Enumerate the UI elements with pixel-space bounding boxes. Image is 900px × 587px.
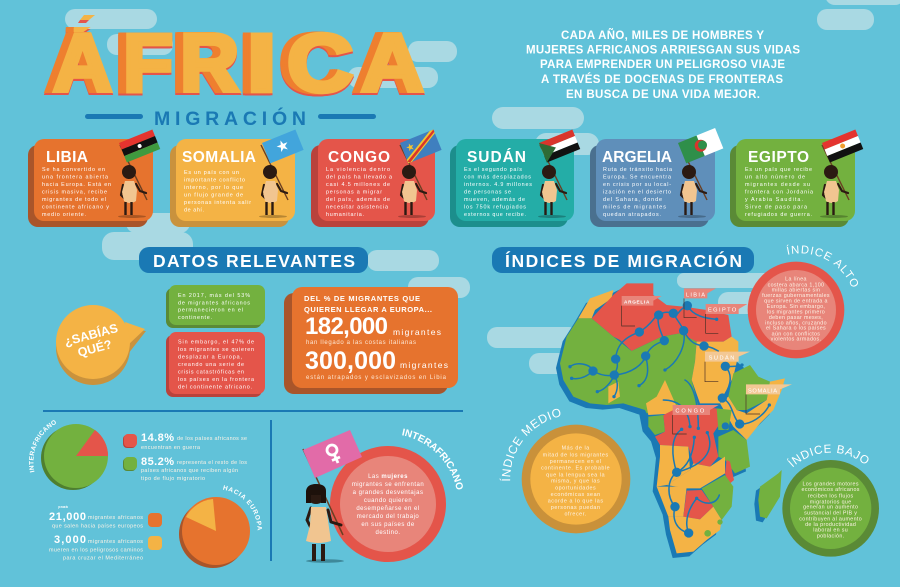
circle: índice bajo: sustancial del PIB y: [804, 510, 857, 516]
title: ÁFRICA: I: [246, 18, 277, 109]
legend: hacia Europa: mueren en los peligrosos caminos: [49, 548, 143, 554]
callout: ¿Sabías qué?: QUÉ?: [76, 336, 113, 360]
panel: Congo: casi 4.5 millones de: [326, 182, 390, 188]
panel: Libia: medio oriente.: [42, 212, 86, 218]
panel: migrantes que quieren llegar a Europa: QUIEREN LLEGAR A EUROPA...: [304, 305, 432, 314]
circle: índice alto: La línea: [785, 277, 807, 283]
panel: Somalia: Es un país con un: [184, 170, 239, 176]
title: ÁFRICA: [44, 15, 425, 96]
legend: hacia Europa: para cruzar el Mediterráneo: [63, 556, 143, 562]
panel: Argelia: quedan atrapados.: [603, 212, 661, 218]
panel: Sudán: con más desplazados: [464, 174, 531, 180]
map flag: Sudán: SUDÁN: [709, 355, 735, 362]
panel: migrantes que quieren llegar a Europa: 182,000: [305, 313, 388, 340]
subtitle: MIGRACIÓN: MIGRACIÓN: [154, 106, 306, 130]
title: ÁFRICA: C: [287, 18, 353, 109]
panel: 53%: continente.: [178, 315, 212, 321]
panel: migrantes que quieren llegar a Europa: migrantes: [400, 360, 448, 370]
circle: índice medio: [500, 408, 630, 534]
map: Africa migration: [500, 244, 879, 558]
legend: hacia Europa: 3,000: [54, 534, 86, 546]
panel: mujeres migrantes: Las mujeres: [368, 474, 408, 480]
map flag: Congo: CONGO: [675, 409, 705, 415]
circle: índice medio: Más de la: [562, 446, 590, 452]
map flag: Libia: LIBIA: [686, 293, 705, 299]
panel: Congo: La violencia dentro: [326, 167, 390, 173]
panel: Argelia: del Sahara, donde: [603, 197, 662, 203]
panel: Sudán: de personas se: [464, 190, 511, 196]
map flag: Argelia: [622, 296, 662, 326]
circle: índice alto: costera abarca 1,100: [768, 282, 824, 288]
legend: interafricano: encuentran en guerra: [141, 445, 200, 451]
pie chart: interafricano: [28, 420, 108, 490]
panel: Argelia: Ruta de tránsito hacia: [603, 167, 672, 173]
panel: Somalia: interno, por lo que: [184, 185, 243, 191]
legend: interafricano: países africanos que reciben algún: [141, 468, 238, 474]
heading: Datos relevantes: DATOS RELEVANTES: [153, 251, 355, 271]
panel: Somalia: un flujo grande de: [184, 192, 243, 198]
intro text: [526, 29, 800, 101]
panel: Libia: una frontera abierta: [42, 174, 108, 180]
map flag: Sudán: [705, 352, 750, 382]
intro text: CADA AÑO, MILES DE HOMBRES Y: [561, 29, 764, 42]
panel: mujeres migrantes: cuando quieren: [364, 498, 412, 504]
panel: mujeres migrantes: mercado del trabajo: [357, 514, 419, 520]
panel: Argelia: en crisis por su local-: [603, 182, 671, 188]
panel: mujeres migrantes: INTERAFRICANO: [402, 428, 463, 490]
panel: Egipto: EGIPTO: [748, 149, 809, 166]
panel: Sudán: los 750k refugiados: [464, 204, 526, 210]
circle: índice medio: ofrecer.: [565, 511, 587, 517]
legend: hacia Europa: 21,000: [49, 511, 86, 523]
title: ÁFRICA: F: [123, 18, 173, 109]
legend: hacia Europa: migrantes africanos: [88, 515, 143, 521]
circle: índice alto: los migrantes primero: [767, 309, 825, 315]
panel: Sudán: [450, 130, 580, 227]
map flag: Egipto: EGIPTO: [708, 308, 737, 314]
panel: migrantes que quieren llegar a Europa: migrantes: [393, 327, 441, 337]
panel: migrantes que quieren llegar a Europa: [284, 287, 458, 394]
circle: índice bajo: económicos africanos: [802, 487, 860, 493]
panel: Somalia: personas intenta salir: [184, 200, 251, 206]
panel: migrantes que quieren llegar a Europa: DEL % DE MIGRANTES QUE: [304, 294, 420, 303]
panel: Egipto: y Arabia Saudita.: [745, 197, 803, 203]
circle: índice medio: permanecen en el: [550, 459, 602, 465]
panel: Congo: del país, además de: [326, 197, 390, 203]
circle: índice medio: acorde a lo que las: [548, 498, 604, 504]
panel: Libia: continente africano y: [42, 204, 109, 210]
circle: índice bajo: migratorios que: [810, 499, 852, 505]
legend: interafricano: [123, 432, 247, 482]
panel: mujeres migrantes: [302, 428, 463, 563]
panel: Congo: ★: [404, 141, 417, 155]
panel: Somalia: de ahí.: [184, 208, 204, 214]
panel: Egipto: Es un país que recibe: [745, 167, 812, 173]
panel: Egipto: refugiados de guerra.: [745, 212, 812, 218]
circle: índice bajo: generan un aumento: [803, 505, 858, 511]
panel: Congo: [311, 130, 442, 227]
circle: índice medio: personas puedan: [551, 505, 601, 511]
panel: Libia: LIBIA: [46, 149, 88, 166]
panel: Sudán: mueven, además de: [464, 197, 525, 203]
panel: mujeres migrantes: migrantes se enfrentan: [352, 482, 424, 488]
map flag: Libia: [684, 288, 716, 318]
legend: interafricano: tipo de flujo migratorio: [141, 476, 205, 482]
panel: 53%: [166, 285, 265, 328]
route nodes: [568, 301, 771, 538]
intro text: MUJERES AFRICANOS ARRIESGAN SUS VIDAS: [526, 44, 800, 56]
legend: hacia Europa: [49, 504, 162, 562]
panel: Somalia: ★: [273, 136, 292, 157]
panel: Egipto: un alto número de: [745, 174, 805, 180]
panel: Libia: [28, 130, 160, 227]
circle: índice alto: violentos armados.: [771, 337, 821, 343]
circle: índice bajo: laboral en su: [813, 528, 848, 534]
panel: Somalia: SOMALIA: [182, 149, 256, 166]
circle: índice bajo: Los grandes motores: [802, 481, 859, 487]
callout: ¿Sabías qué?: [56, 305, 146, 385]
legend: interafricano: 85.2%: [141, 456, 174, 468]
heading: Índices de migración: ÍNDICES DE MIGRACIÓN: [505, 250, 742, 271]
legend: hacia Europa: por cada: [58, 504, 69, 509]
title: ÁFRICA: A: [361, 17, 424, 108]
panel: Congo: necesitar asistencia: [326, 204, 388, 210]
circle: índice medio: continente. Es probable: [541, 466, 610, 472]
migration routes: [570, 306, 769, 533]
pie chart: interafricano: INTERAFRICANO: [28, 420, 56, 472]
panel: migrantes que quieren llegar a Europa: han llegado a las costas italianas: [306, 340, 416, 346]
map flag: Somalia: [746, 384, 792, 414]
panel: Libia: crisis masiva, recibe: [42, 190, 107, 196]
pie chart: hacia Europa: [179, 485, 262, 568]
legend: interafricano: de los países africanos se: [177, 436, 247, 442]
panel: Sudán: internos. 4.9 millones: [464, 182, 532, 188]
circle: índice alto: fuerzas gubernamentales: [762, 293, 830, 299]
circle: índice bajo: población.: [817, 534, 844, 540]
circle: índice alto: deben pasar meses,: [769, 315, 823, 321]
circle: índice alto: el Sahara o los países: [766, 326, 826, 332]
circle: índice bajo: ÍNDICE BAJO: [787, 444, 869, 467]
panel: migrantes que quieren llegar a Europa: 300,000: [305, 347, 396, 375]
map regions: [560, 283, 785, 553]
panel: migrantes que quieren llegar a Europa: están atrapados y esclavizados en Libia: [306, 375, 447, 381]
panel: Libia: hacia Europa. Está en: [42, 182, 111, 188]
panel: 47%: creando una serie de: [178, 362, 244, 368]
panel: 53%: de migrantes africanos: [178, 300, 250, 306]
panel: Egipto: migrantes desde su: [745, 182, 810, 188]
panel: Congo: CONGO: [328, 149, 390, 166]
subtitle: MIGRACIÓN: [85, 106, 376, 130]
panel: Egipto: frontera con Jordania: [745, 190, 813, 196]
panel: 53%: permanecieron en el: [178, 308, 243, 314]
panel: Argelia: Europa. Se encuentra: [603, 174, 671, 180]
circle: índice alto: ÍNDICE ALTO: [786, 244, 858, 287]
panel: mujeres migrantes: desempeñarse en el: [356, 506, 420, 512]
panel: mujeres migrantes: destino.: [375, 530, 401, 536]
callout: ¿Sabías qué?: ¿SABÍAS: [63, 320, 119, 349]
panel: 47%: los migrantes se quieren: [178, 347, 254, 353]
background clouds: [65, 0, 900, 374]
heading: Índices de migración: [492, 247, 754, 273]
circle: índice alto: aún con conflictos: [772, 331, 820, 337]
circle: índice medio: oportunidades: [555, 485, 596, 491]
map flag: Argelia: ARGELIA: [624, 299, 650, 304]
pie chart: hacia Europa: HACIA EUROPA: [223, 485, 262, 530]
circle: índice medio: económicas sean: [551, 492, 601, 498]
circle: índice alto: millas abiertas sin: [772, 288, 820, 294]
divider: [43, 410, 463, 412]
intro text: PARA EMPRENDER UN PELIGROSO VIAJE: [540, 59, 785, 71]
intro text: EN BUSCA DE UNA VIDA MEJOR.: [566, 89, 760, 101]
panel: Somalia: [170, 130, 304, 227]
panel: Egipto: Sirve de paso para: [745, 204, 807, 210]
title: ÁFRICA: R: [180, 18, 239, 109]
map flag: Congo: [673, 405, 719, 434]
panel: Egipto: [730, 130, 863, 227]
woman with flag: [303, 430, 362, 563]
legend: hacia Europa: que salen hacia países europeos: [52, 524, 143, 530]
panel: Sudán: SUDÁN: [467, 149, 526, 166]
panel: Libia: Se ha convertido en: [42, 167, 105, 173]
legend: hacia Europa: migrantes africanos: [88, 539, 143, 545]
panel: Congo: personas a migrar: [326, 190, 382, 196]
title: ÁFRICA: Á: [53, 18, 112, 109]
panel: 47%: crisis catastróficas en: [178, 370, 244, 376]
panel: 47%: [166, 332, 265, 397]
panel: Sudán: externos que recibe.: [464, 212, 526, 218]
panel: 47%: Sin embargo, el 47% de: [178, 340, 254, 346]
map flag: Somalia: SOMALIA: [748, 388, 777, 394]
map flag: Egipto: [706, 304, 747, 333]
panel: Argelia: miles de migrantes: [603, 204, 666, 210]
circle: índice medio: ÍNDICE MEDIO: [500, 408, 560, 481]
circle: índice alto: [748, 244, 858, 358]
panel: mujeres migrantes: en sus países de: [361, 522, 415, 528]
intro text: A TRAVÉS DE DOCENAS DE FRONTERAS: [541, 73, 783, 86]
panel: Congo: humanitaria.: [326, 212, 364, 218]
circle: índice medio: misma, y que las: [551, 479, 600, 485]
circle: índice bajo: de la productividad: [805, 522, 856, 528]
circle: índice alto: Europa. Sin embargo,: [767, 304, 825, 310]
circle: índice alto: incluso años, cruzando: [765, 320, 827, 326]
panel: mujeres migrantes: a grandes desventajas: [353, 490, 423, 496]
circle: índice medio: mitad de los migrantes: [543, 453, 609, 459]
panel: Sudán: Es el segundo país: [464, 167, 522, 173]
panel: Argelia: ización en el desierto: [603, 190, 671, 196]
panel: Congo: del país ha llevado a: [326, 174, 392, 180]
panel: Somalia: importante conflicto: [184, 178, 245, 184]
circle: índice bajo: [782, 444, 879, 557]
legend: interafricano: representa el resto de los: [177, 460, 247, 466]
panel: Libia: migrantes de todo el: [42, 197, 106, 203]
heading: Datos relevantes: [139, 247, 368, 273]
circle: índice medio: que la lengua sea la: [546, 472, 605, 478]
legend: interafricano: 14.8%: [141, 432, 174, 444]
circle: índice bajo: reciben los flujos: [808, 493, 854, 499]
panel: 47%: del continente africano.: [178, 384, 252, 390]
circle: índice bajo: contribuyen al aumento: [799, 516, 862, 522]
panel: 47%: desplazar a Europa,: [178, 354, 242, 360]
panel: Argelia: ARGELIA: [602, 149, 672, 166]
panel: 53%: En 2017, más del 53%: [178, 293, 250, 299]
map shadow: [556, 288, 781, 558]
circle: índice alto: que sirven de entrada a: [764, 299, 828, 305]
panel: 47%: los países en la frontera: [178, 377, 254, 383]
panel: Argelia: [590, 128, 723, 227]
